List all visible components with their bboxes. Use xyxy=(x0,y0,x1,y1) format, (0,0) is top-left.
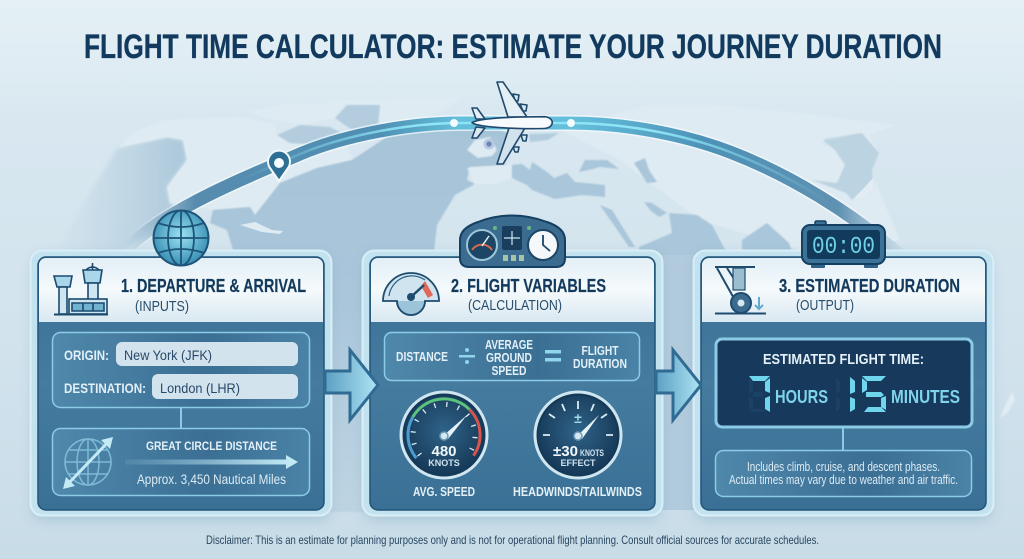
northern waters xyxy=(277,105,559,145)
gauge: average speed xyxy=(401,392,487,478)
input group xyxy=(52,332,310,408)
gauge label: average speed: AVG. SPEED xyxy=(413,484,475,499)
icon: globe with diagonal arrow xyxy=(63,437,113,489)
formula box xyxy=(384,332,640,380)
iberia and europe xyxy=(467,165,512,184)
arrow: calculation to output xyxy=(656,350,701,420)
icon: landing gear xyxy=(715,267,766,314)
panel 1 header: 1. DEPARTURE & ARRIVAL xyxy=(121,276,306,296)
arrow: inputs to calculation xyxy=(325,350,378,420)
digits 15 xyxy=(836,376,886,412)
display label: ESTIMATED FLIGHT TIME: xyxy=(763,351,924,368)
note box: Includes climb, cruise, and descent phases. xyxy=(747,460,940,474)
panel 1 header: (INPUTS) xyxy=(135,299,189,315)
gauge: wind effect: EFFECT xyxy=(560,458,596,468)
equals symbol xyxy=(545,350,561,362)
origin input: New York (JFK) xyxy=(124,347,212,363)
panel 3: estimated duration xyxy=(694,250,994,520)
icon: digital clock xyxy=(802,221,885,268)
panel 2 header xyxy=(371,258,654,322)
icon: globe badge xyxy=(154,210,208,266)
gauge: wind effect: KNOTS xyxy=(580,448,604,458)
disclaimer: Disclaimer: This is an estimate for planning purposes only and is not for operational flight planning. Consult official sources for accurate schedules. xyxy=(206,533,819,547)
formula box: FLIGHT xyxy=(582,343,619,358)
gauge: average speed: KNOTS xyxy=(428,458,460,468)
destination label: DESTINATION: xyxy=(64,380,146,396)
distance label: GREAT CIRCLE DISTANCE xyxy=(146,439,277,453)
origin label: ORIGIN: xyxy=(64,347,109,363)
distance box xyxy=(52,428,310,496)
formula box: AVERAGE xyxy=(485,337,533,352)
flight path arc xyxy=(125,119,900,255)
gauge: wind effect: ± xyxy=(574,410,582,426)
destination input xyxy=(152,374,298,399)
far east waters xyxy=(812,133,879,200)
icon: control towers xyxy=(54,263,108,314)
inland seas xyxy=(512,158,794,257)
panel 3 header xyxy=(702,258,985,322)
land tint xyxy=(117,98,900,250)
gauge: wind effect: ±30 xyxy=(553,443,578,460)
gauge: wind effect xyxy=(535,392,621,478)
note box: Actual times may vary due to weather and air traffic. xyxy=(729,473,958,487)
map pin: London xyxy=(484,138,494,150)
formula box: GROUND xyxy=(486,350,532,365)
formula box: DISTANCE xyxy=(396,349,448,364)
gauge label: headwinds and tailwinds: HEADWINDS/TAILWINDS xyxy=(513,484,642,499)
panel 3 header: 3. ESTIMATED DURATION xyxy=(779,276,960,296)
formula box: DURATION xyxy=(573,356,627,371)
note box xyxy=(716,450,972,496)
minutes unit: MINUTES xyxy=(891,387,960,407)
icon: speed gauge xyxy=(383,273,439,315)
cuba xyxy=(240,222,283,234)
digit 7 xyxy=(749,376,770,412)
distance value: Approx. 3,450 Nautical Miles xyxy=(137,472,286,487)
origin input xyxy=(116,342,298,366)
panel 2 header: 2. FLIGHT VARIABLES xyxy=(451,276,606,296)
british isles xyxy=(467,137,497,158)
icon: digital clock: 00:00 xyxy=(812,234,875,261)
new zealand xyxy=(1000,392,1015,418)
atlantic ocean xyxy=(200,125,512,512)
panel 2: flight variables xyxy=(362,250,662,520)
formula box: SPEED xyxy=(492,363,526,378)
map pin: New York xyxy=(268,151,290,181)
panel 3 header: (OUTPUT) xyxy=(796,298,854,314)
pacific shading xyxy=(50,137,187,500)
divide symbol xyxy=(459,348,475,364)
icon: cockpit dashboard xyxy=(460,216,565,267)
flight time display xyxy=(716,339,972,427)
icon: airplane xyxy=(472,82,552,164)
panel 2 header: (CALCULATION) xyxy=(468,298,562,314)
destination input: London (LHR) xyxy=(160,380,240,396)
panel 1 header xyxy=(39,258,323,322)
japan xyxy=(852,178,874,200)
gauge: average speed: 480 xyxy=(431,443,457,460)
distance arrow xyxy=(125,455,298,469)
hours unit: HOURS xyxy=(775,387,828,407)
panel 1: departure and arrival xyxy=(30,250,332,520)
indian ocean xyxy=(650,255,800,510)
